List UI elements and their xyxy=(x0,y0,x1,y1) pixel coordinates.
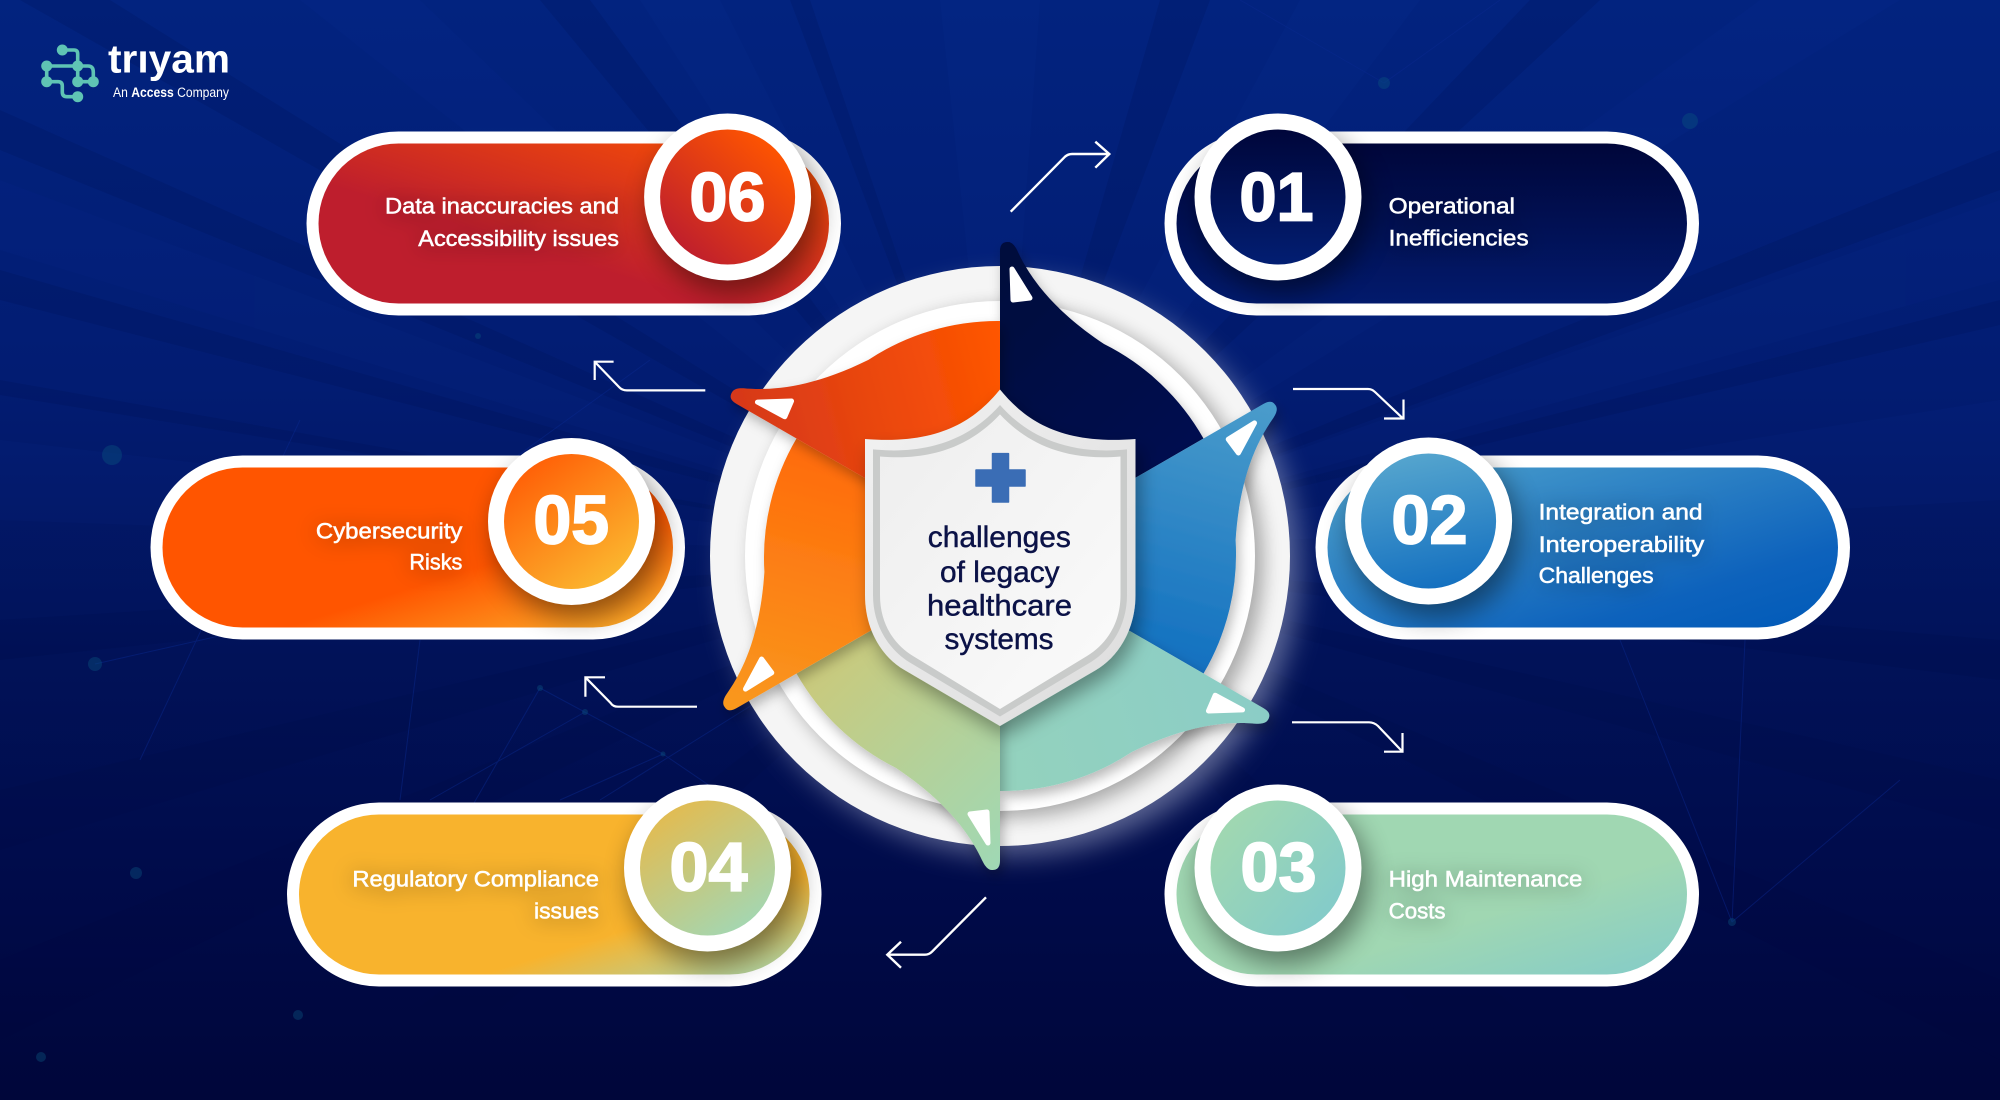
arrow: to 01 xyxy=(1011,142,1109,212)
shield title: of legacy xyxy=(940,556,1060,589)
petal 06 red xyxy=(728,223,1102,556)
icon: medical cross xyxy=(976,454,1025,502)
shield xyxy=(865,390,1136,726)
inner white ring xyxy=(745,301,1255,811)
petal 03 teal xyxy=(898,556,1272,889)
number 05: 05 xyxy=(534,481,609,558)
shield title: challenges xyxy=(928,521,1071,554)
panel: 02 Integration and Interoperability Challenges xyxy=(1316,438,1850,640)
number 02: 02 xyxy=(1392,482,1468,559)
tagline: An Access Company xyxy=(113,85,229,100)
icon: circuit nodes xyxy=(41,44,99,102)
number 03: 03 xyxy=(1240,828,1316,905)
label xyxy=(316,518,462,575)
label: Inefficiencies xyxy=(1389,226,1529,251)
label: Risks xyxy=(409,550,462,575)
arrow: to 05 xyxy=(585,677,697,707)
label: Challenges xyxy=(1539,563,1654,588)
label: Costs xyxy=(1389,898,1446,923)
shield title: healthcare xyxy=(927,590,1072,623)
ring glow xyxy=(725,281,1299,855)
label: Accessibility issues xyxy=(418,226,619,251)
shield title xyxy=(927,521,1072,656)
logo: triyam xyxy=(41,38,230,102)
label: issues xyxy=(534,898,599,923)
arrow: to 03 xyxy=(1292,722,1402,752)
petal 04 green xyxy=(796,556,1000,870)
panel: 03 High Maintenance Costs xyxy=(1164,784,1699,986)
number 06: 06 xyxy=(690,158,766,235)
label: Operational xyxy=(1389,194,1515,219)
number 01: 01 xyxy=(1240,158,1314,235)
label: Cybersecurity xyxy=(316,518,462,544)
label xyxy=(1539,500,1704,588)
panel: 05 Cybersecurity Risks xyxy=(150,438,685,640)
number 04: 04 xyxy=(670,828,748,905)
label: Integration and xyxy=(1539,500,1703,525)
label: Regulatory Compliance xyxy=(352,867,599,892)
label xyxy=(385,194,619,251)
petal 01 navy xyxy=(1000,242,1204,556)
petal 02 blue xyxy=(1000,399,1374,732)
arrow: to 02 xyxy=(1293,389,1404,418)
central wheel xyxy=(708,242,1316,872)
label xyxy=(1389,867,1582,923)
arrow: to 06 xyxy=(595,362,705,390)
panel: 04 Regulatory Compliance issues xyxy=(287,784,822,986)
wordmark: trıyam xyxy=(108,38,230,82)
label: Interoperability xyxy=(1539,532,1704,557)
outer ring xyxy=(710,266,1290,846)
panel: 06 Data inaccuracies and Accessibility issues xyxy=(306,114,841,316)
label: Data inaccuracies and xyxy=(385,194,619,219)
petal 05 orange xyxy=(626,380,1000,713)
label xyxy=(1389,194,1529,251)
label: High Maintenance xyxy=(1389,867,1582,892)
arrow: to 04 xyxy=(887,897,986,968)
shield title: systems xyxy=(944,623,1054,656)
panel: 01 Operational Inefficiencies xyxy=(1164,114,1699,316)
label xyxy=(352,867,599,923)
